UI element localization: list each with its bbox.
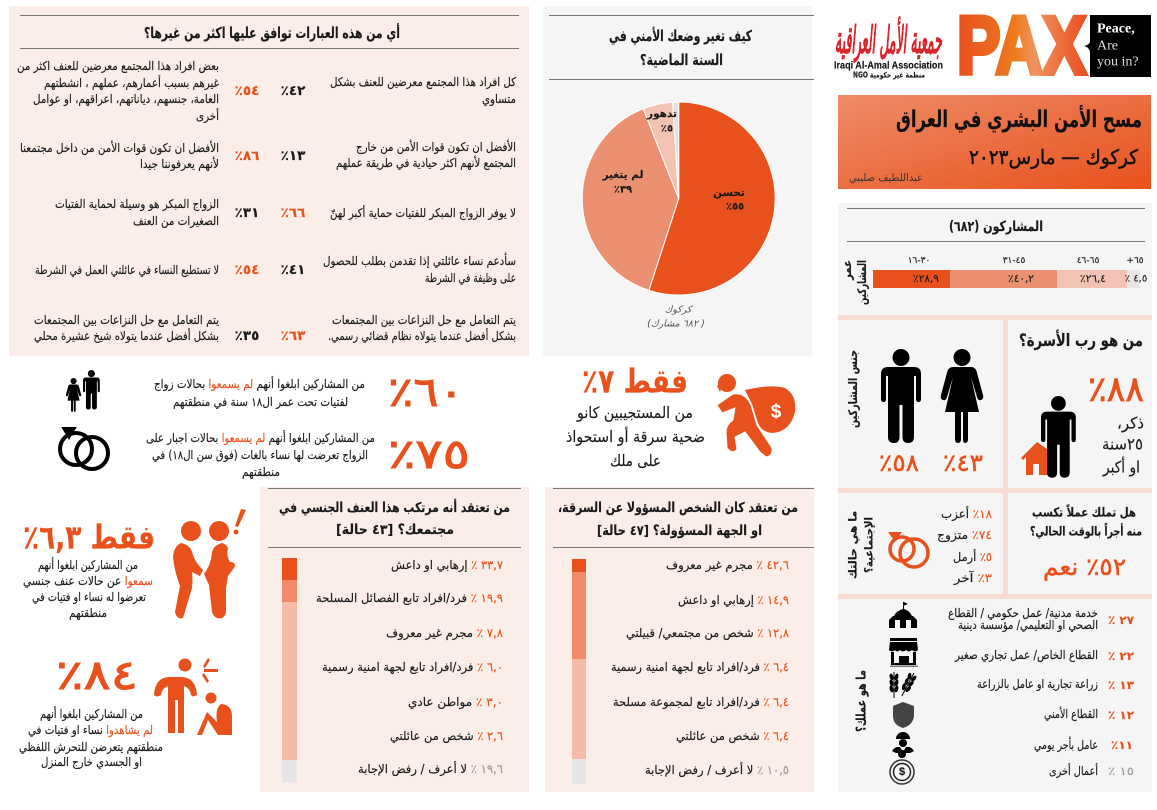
- age stacked bar: ٢٨,٩٪: [913, 273, 939, 285]
- statement row 4: على وظيفة في الشرطة: [425, 271, 516, 286]
- theft list: ١٢,٨ ٪ شخص من مجتمعي/ قبيلتي: [626, 626, 790, 641]
- callout: sexual violence 6.3%: [23, 509, 246, 620]
- heading: paid work: هل تملك عملاً تكسب: [1032, 504, 1136, 520]
- icon: thief with money sack: $: [771, 402, 782, 422]
- callout: forced marriage 75%: [60, 428, 470, 479]
- occupation list: الصحي او التعليمي/ مؤسسة دينية: [958, 618, 1098, 633]
- marital list: ٣٪ آخر: [953, 570, 993, 586]
- age stacked bar: ٤,٥ ٪: [1125, 274, 1147, 284]
- icon: wheat: [889, 671, 919, 698]
- heading: security change: [609, 27, 752, 69]
- subtitle: كركوك — مارس٢٠٢٣: [969, 145, 1138, 169]
- stat 84%: ٨٤٪: [56, 651, 138, 699]
- theft list: [611, 558, 790, 778]
- statement row 4: [35, 252, 516, 286]
- stat 60%: ٦٠٪: [388, 368, 464, 416]
- occupation list: القطاع الخاص/ عمل تجاري صغير: [954, 648, 1098, 663]
- statement row 5: بشكل أفضل عندما يتولاه نظام قضائي رسمي.: [328, 328, 516, 344]
- panel: sexual violence perpetrator: [260, 487, 529, 792]
- icon: thief with money sack: [717, 374, 795, 457]
- icon: government building: [889, 602, 917, 628]
- pie labels: لم يتغير: [602, 169, 643, 181]
- pie labels: [602, 108, 745, 212]
- icon: rings black: [60, 428, 108, 469]
- perpetrator list: ٦,٠ ٪ فرد/افراد تابع لجهة امنية رسمية: [322, 660, 503, 675]
- heading: theft perpetrator: [558, 500, 798, 539]
- statement row 3: الزواج المبكر هو وسيلة لحماية الفتيات: [55, 197, 219, 212]
- icon: shop: [889, 638, 918, 667]
- theft list: ٤٢,٦ ٪ مجرم غير معروف: [666, 558, 789, 573]
- text: theft: على ملك: [610, 452, 661, 470]
- text: harassment: من المشاركين ابلغوا أنهم: [40, 706, 143, 722]
- occupation list: عامل بأجر يومي: [1034, 736, 1098, 753]
- logo: Iraqi Al-Amal Association: منظمة غير حكومية NGO: [853, 70, 925, 80]
- callout: theft 7%: [566, 362, 795, 470]
- perpetrator list: ٢,٦ ٪ شخص من عائلتي: [390, 729, 503, 744]
- statement row 2: الأفضل ان تكون قوات الأمن من داخل مجتمعنا: [20, 140, 219, 156]
- perpetrator list: ٣٣,٧ ٪ إرهابي او داعش: [391, 558, 504, 573]
- age axis label: عمر: [840, 260, 854, 281]
- pie caption: كركوك: [664, 304, 694, 316]
- statement row 1: ٤٢٪: [281, 83, 306, 99]
- panel: statements agreement: [9, 6, 529, 356]
- pie labels: تحسن: [713, 187, 745, 199]
- age axis label: المشاركين: [855, 260, 869, 305]
- statement row 1: ٥٤٪: [235, 83, 259, 99]
- age stacked bar: ٢٦,٤٪: [1080, 273, 1106, 285]
- statement row 5: ٦٣٪: [281, 328, 306, 344]
- logo: PAX: Are: [1097, 38, 1118, 54]
- text: forced marriage: [146, 430, 375, 479]
- pie caption: [647, 304, 705, 330]
- marital label: [846, 511, 876, 579]
- text: sexual violence: منطقتهم: [69, 606, 107, 620]
- age stacked bar: [873, 256, 1147, 288]
- heading: perpetrator: من تعتقد أنه مرتكب هذا العنف الجنسي في: [279, 499, 510, 516]
- stacked vertical bar: [282, 558, 297, 782]
- text: harassment: [19, 706, 163, 770]
- text: sexual violence: تعرضوا له نساء او فتيات في: [32, 590, 146, 605]
- age stacked bar: ٦٥-٤٦: [1077, 256, 1099, 266]
- statement row 2: لأنهم يعرفوننا جيدا: [140, 156, 219, 172]
- perpetrator list: ٣,٠ ٪ مواطن عادي: [408, 695, 503, 710]
- theft list: ٦,٤ ٪ فرد/افراد تابع لجهة امنية رسمية: [611, 660, 789, 675]
- marital label: الإجتماعية؟: [862, 517, 876, 573]
- perpetrator list: [316, 558, 504, 777]
- statement row 1: [17, 59, 516, 124]
- occupation list: ١٢ ٪: [1108, 708, 1134, 722]
- text: sexual violence: [23, 557, 153, 620]
- statement row 1: غيرهم بسبب أعمارهم، عملهم ، انشطتهم: [44, 75, 219, 91]
- text: male 25+: [1102, 414, 1144, 478]
- heading: paid work: [1030, 504, 1142, 538]
- theft list: ٦,٤ ٪ فرد/افراد تابع لمجموعة مسلحة: [613, 695, 789, 710]
- icon: worker: [892, 732, 914, 758]
- icon: couple: [66, 370, 100, 412]
- heading: perpetrator: مجتمعك؟ [٤٣ حالة]: [336, 522, 454, 538]
- age stacked bar: ٦٥+: [1126, 256, 1144, 266]
- icon: woman: [941, 349, 983, 443]
- statement row 3: ٦٦٪: [281, 205, 305, 221]
- statement row 5: بشكل أفضل عندما يتولاه شيخ عشيرة محلي: [34, 328, 219, 344]
- text: sexual violence: من المشاركين ابلغوا أنهم: [38, 557, 138, 573]
- callout: harassment 84%: [19, 651, 232, 770]
- marital label: ما هي حالتك: [846, 511, 860, 579]
- statement row 1: بعض افراد هذا المجتمع معرضين للعنف اكثر من: [17, 59, 219, 74]
- statement row 5: [34, 313, 516, 344]
- age axis label: [840, 260, 869, 305]
- occupation list: القطاع الأمني: [1044, 706, 1098, 721]
- theft list: ١٠,٥ ٪ لا أعرف / رفض الإجابة: [645, 762, 789, 778]
- statement row 2: الأفضل ان تكون قوات الأمن من خارج: [356, 139, 516, 155]
- gender label: جنس المشاركين: [846, 350, 860, 428]
- icon: coin: $: [899, 766, 905, 778]
- statement row 3: ٣١٪: [235, 205, 259, 221]
- icon: rings orange: [890, 533, 928, 567]
- author: عبداللطيف صليبي: [849, 172, 923, 184]
- text: forced marriage: الزواج تعرضت لها نساء بالغات (فوق سن ال١٨) في: [152, 448, 368, 463]
- gender percentages: [879, 449, 983, 477]
- stat: head of household: ٨٨٪: [1088, 370, 1144, 410]
- panel: theft perpetrator: [545, 487, 814, 792]
- pie labels: ٥٥٪: [726, 202, 744, 212]
- heading: participants: المشاركون (٦٨٢): [949, 219, 1043, 235]
- stat 75%: ٧٥٪: [388, 430, 470, 478]
- panel: participants: [838, 203, 1152, 792]
- age stacked bar: ٤٠,٢٪: [1008, 273, 1034, 285]
- text: child marriage: [154, 376, 365, 410]
- logo: Iraqi Al-Amal Association: Iraqi Al-Amal Association: [834, 60, 943, 72]
- stat 6.3%: فقط ٦,٣٪: [23, 518, 155, 556]
- gender percentages: ٤٣٪: [943, 449, 983, 477]
- pie chart: [582, 102, 775, 295]
- icon: man: [881, 349, 921, 443]
- icon: harassment: [173, 509, 246, 618]
- heading: theft perpetrator: او الجهة المسؤولة؟ [٤٧ حالة]: [597, 523, 762, 539]
- statement row 2: المجتمع لأنهم اكثر حيادية في طريقة عملهم: [336, 155, 516, 171]
- text: جمعية الأمل العراقية: [835, 16, 942, 63]
- statement row 4: ٥٤٪: [235, 262, 259, 278]
- statement row 2: ٨٦٪: [235, 148, 259, 164]
- text: theft: [566, 404, 705, 470]
- text: harassment: او الجسدي خارج المنزل: [41, 755, 142, 770]
- occupation label: ما هو عملك؟: [854, 670, 870, 732]
- heading: perpetrator: [279, 499, 510, 538]
- statement row 4: ٤١٪: [281, 262, 305, 278]
- logo: PAX: PAX: [957, 0, 1086, 92]
- occupation list: ١٥ ٪: [1108, 764, 1134, 778]
- statement row 1: أخرى: [196, 108, 219, 124]
- statement row 3: الصغيرات من العنف: [133, 214, 219, 229]
- occupation list: أعمال أخرى: [1049, 763, 1098, 779]
- text: child marriage: لفتيات تحت عمر ال١٨ سنة في منطقتهم: [173, 395, 348, 410]
- age stacked bar: ٣٠-١٦: [908, 256, 930, 266]
- occupation list: ١٣ ٪: [1108, 678, 1134, 692]
- marital list: [937, 506, 993, 586]
- icon: shield: [893, 702, 914, 728]
- stat: paid work: ٥٢٪ نعم: [1043, 553, 1126, 581]
- statement row 5: يتم التعامل مع حل النزاعات بين المجتمعات: [34, 313, 219, 328]
- occupation list: زراعة تجارية او عامل بالزراعة: [977, 677, 1098, 692]
- statement row 2: ١٣٪: [281, 148, 306, 164]
- perpetrator list: ٧,٨ ٪ مجرم غير معروف: [386, 626, 504, 641]
- logo: PAX: Peace,: [1097, 22, 1135, 36]
- pie labels: ٣٩٪: [614, 184, 632, 196]
- occupation list: خدمة مدنية/ عمل حكومي / القطاع: [948, 606, 1098, 621]
- statement row 2: [20, 139, 516, 172]
- text: theft: من المستجيبين كانو: [576, 404, 693, 422]
- pie labels: ٥٪: [661, 124, 673, 134]
- text: male 25+: ذكر،: [1117, 414, 1144, 434]
- callout: child marriage 60%: [66, 368, 464, 416]
- stat 7%: فقط ٧٪: [582, 362, 688, 400]
- icon: coin: [890, 760, 914, 784]
- marital list: ٥٪ أرمل: [953, 549, 992, 565]
- text: harassment: لم يشاهدوا نساء او فتيات في: [28, 723, 153, 738]
- stacked vertical bar: [572, 559, 586, 784]
- marital list: ١٨٪ أعزب: [941, 506, 993, 522]
- statement row 1: متساوي: [482, 92, 516, 107]
- statement row 4: لا تستطيع النساء في عائلتي العمل في الشرطة: [35, 263, 219, 278]
- text: child marriage: من المشاركين ابلغوا أنهم لم يسمعوا بحالات زواج: [154, 376, 365, 392]
- heading: statements: أي من هذه العبارات توافق عليها اكثر من غيرها؟: [144, 23, 400, 43]
- heading: security change: السنة الماضية؟: [640, 51, 723, 69]
- statement row 3: لا يوفر الزواج المبكر للفتيات حماية أكبر لهنّ: [330, 205, 516, 221]
- pie labels: تدهور: [646, 108, 677, 120]
- occupation list: ٢٢ ٪: [1108, 649, 1134, 663]
- theft list: ١٤,٩ ٪ إرهابي او داعش: [678, 593, 789, 608]
- text: forced marriage: من المشاركين ابلغوا أنهم لم يسمعوا بحالات اجبار على: [146, 430, 375, 446]
- panel: security change pie: [543, 6, 814, 356]
- perpetrator list: ١٩,٩ ٪ فرد/افراد تابع الفصائل المسلحة: [316, 591, 503, 606]
- occupation list: ٢٧ ٪: [1108, 613, 1134, 627]
- text: harassment: منطقتهم يتعرضن للتحرش اللفظي: [19, 740, 163, 755]
- text: male 25+: او أكبر: [1102, 456, 1140, 478]
- statement row 5: يتم التعامل مع حل النزاعات بين المجتمعات: [332, 313, 516, 328]
- statement row 5: ٣٥٪: [235, 328, 259, 344]
- icon: head of household with house: [1021, 396, 1076, 478]
- text: male 25+: ٢٥سنة: [1102, 434, 1143, 454]
- icon: victim and onlooker: [154, 658, 232, 735]
- theft list: ٦,٤ ٪ شخص من عائلتي: [676, 729, 789, 744]
- occupation list: ١١٪: [1111, 738, 1133, 752]
- heading: security change: كيف تغير وضعك الأمني في: [609, 27, 752, 45]
- logo: PAX: you in?: [1097, 54, 1139, 70]
- text: theft: ضحية سرقة أو استحواذ: [566, 426, 705, 447]
- pie caption: ( ٦٨٢ مشارك): [647, 318, 705, 330]
- perpetrator list: ١٩,٦ ٪ لا أعرف / رفض الإجابة: [358, 761, 503, 777]
- gender percentages: ٥٨٪: [879, 449, 919, 477]
- marital list: ٧٤٪ متزوج: [937, 528, 992, 543]
- age stacked bar: ٤٥-٣١: [1003, 256, 1025, 266]
- statement row 1: كل افراد هذا المجتمع معرضين للعنف بشكل: [330, 75, 516, 90]
- statement row 1: العامة، جنسهم، دياناتهم، اعراقهم، او عوامل: [33, 92, 219, 107]
- statement row 4: سأدعم نساء عائلتي إذا تقدمن بطلب للحصول: [323, 252, 516, 269]
- heading: theft perpetrator: من تعتقد كان الشخص المسؤولا عن السرقة،: [558, 500, 798, 516]
- statement row 3: [55, 197, 516, 229]
- text: forced marriage: منطقتهم: [242, 465, 280, 479]
- logo: Iraqi Al-Amal Association: [834, 16, 943, 80]
- title banner: [838, 95, 1151, 189]
- occupation list: [948, 606, 1134, 779]
- text: sexual violence: سمعوا عن حالات عنف جنسي: [23, 574, 153, 589]
